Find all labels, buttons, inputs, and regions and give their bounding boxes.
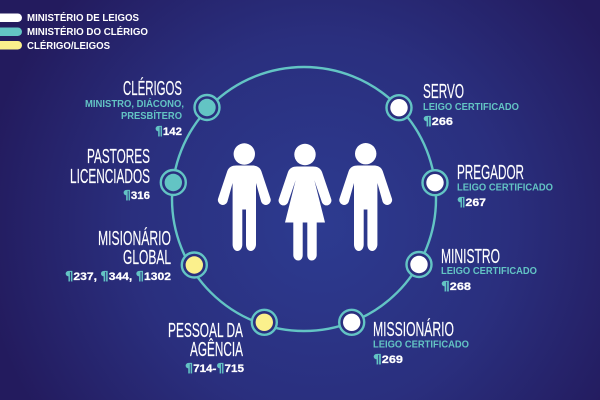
- label: pessoal da agência: ¶714-¶715: [185, 361, 244, 375]
- label: missionário global: GLOBAL: [123, 246, 171, 269]
- label: servo: ¶266: [423, 114, 453, 128]
- label: pastores licenciados: [70, 145, 150, 202]
- node: ministro: [406, 252, 432, 277]
- node: clérigos: [194, 95, 220, 120]
- icon: man left: [218, 143, 271, 251]
- node: servo: [386, 95, 412, 120]
- label: pastores licenciados: PASTORES: [87, 145, 150, 168]
- label: clérigos: MINISTRO, DIÁCONO,: [85, 97, 184, 110]
- label: clérigos: PRESBÍTERO: [121, 109, 182, 122]
- label: servo: [423, 80, 519, 128]
- legend item: ministério do clérigo: MINISTÉRIO DO CLÉRIGO: [27, 25, 148, 38]
- label: missionário global: [65, 227, 171, 283]
- label: clérigos: [85, 77, 184, 138]
- label: missionário: LEIGO CERTIFICADO: [373, 340, 469, 350]
- label: clérigos: CLÉRIGOS: [123, 77, 182, 100]
- legend: [0, 11, 148, 52]
- label: pregador: PREGADOR: [457, 161, 524, 184]
- label: missionário global: ¶237, ¶344, ¶1302: [65, 269, 171, 283]
- label: pregador: LEIGO CERTIFICADO: [457, 182, 553, 194]
- label: ministro: LEIGO CERTIFICADO: [441, 266, 537, 277]
- label: clérigos: ¶142: [155, 124, 182, 138]
- label: ministro: [441, 245, 537, 293]
- label: pessoal da agência: AGÊNCIA: [190, 338, 243, 361]
- label: pastores licenciados: ¶316: [123, 188, 150, 202]
- label: pessoal da agência: PESSOAL DA: [168, 319, 243, 342]
- node: missionário global: [182, 252, 207, 278]
- label: servo: LEIGO CERTIFICADO: [423, 102, 519, 113]
- label: servo: SERVO: [423, 80, 464, 103]
- node: missionário: [339, 310, 364, 335]
- legend item: clérigo/leigos: [0, 39, 110, 52]
- label: ministro: ¶268: [441, 279, 471, 293]
- label: missionário global: MISIONÁRIO: [98, 227, 171, 250]
- label: ministro: MINISTRO: [441, 245, 500, 268]
- label: missionário: ¶269: [373, 352, 403, 366]
- legend item: ministério de leigos: MINISTÉRIO DE LEIGOS: [27, 11, 139, 24]
- label: missionário: [373, 318, 469, 366]
- label: pregador: [457, 161, 553, 209]
- label: pastores licenciados: LICENCIADOS: [70, 165, 150, 188]
- icon: man right: [339, 143, 392, 251]
- legend item: ministério do clérigo: [0, 25, 148, 38]
- label: pessoal da agência: [168, 319, 244, 375]
- label: pregador: ¶267: [457, 195, 486, 209]
- legend item: clérigo/leigos: CLÉRIGO/LEIGOS: [27, 39, 110, 52]
- legend item: ministério de leigos: [0, 11, 139, 24]
- node: pessoal da agência: [252, 310, 277, 335]
- node: pastores licenciados: [161, 170, 186, 195]
- ring: [172, 67, 436, 331]
- icon: woman centre: [279, 144, 331, 260]
- label: missionário: MISSIONÁRIO: [373, 318, 454, 341]
- node: pregador: [422, 170, 448, 195]
